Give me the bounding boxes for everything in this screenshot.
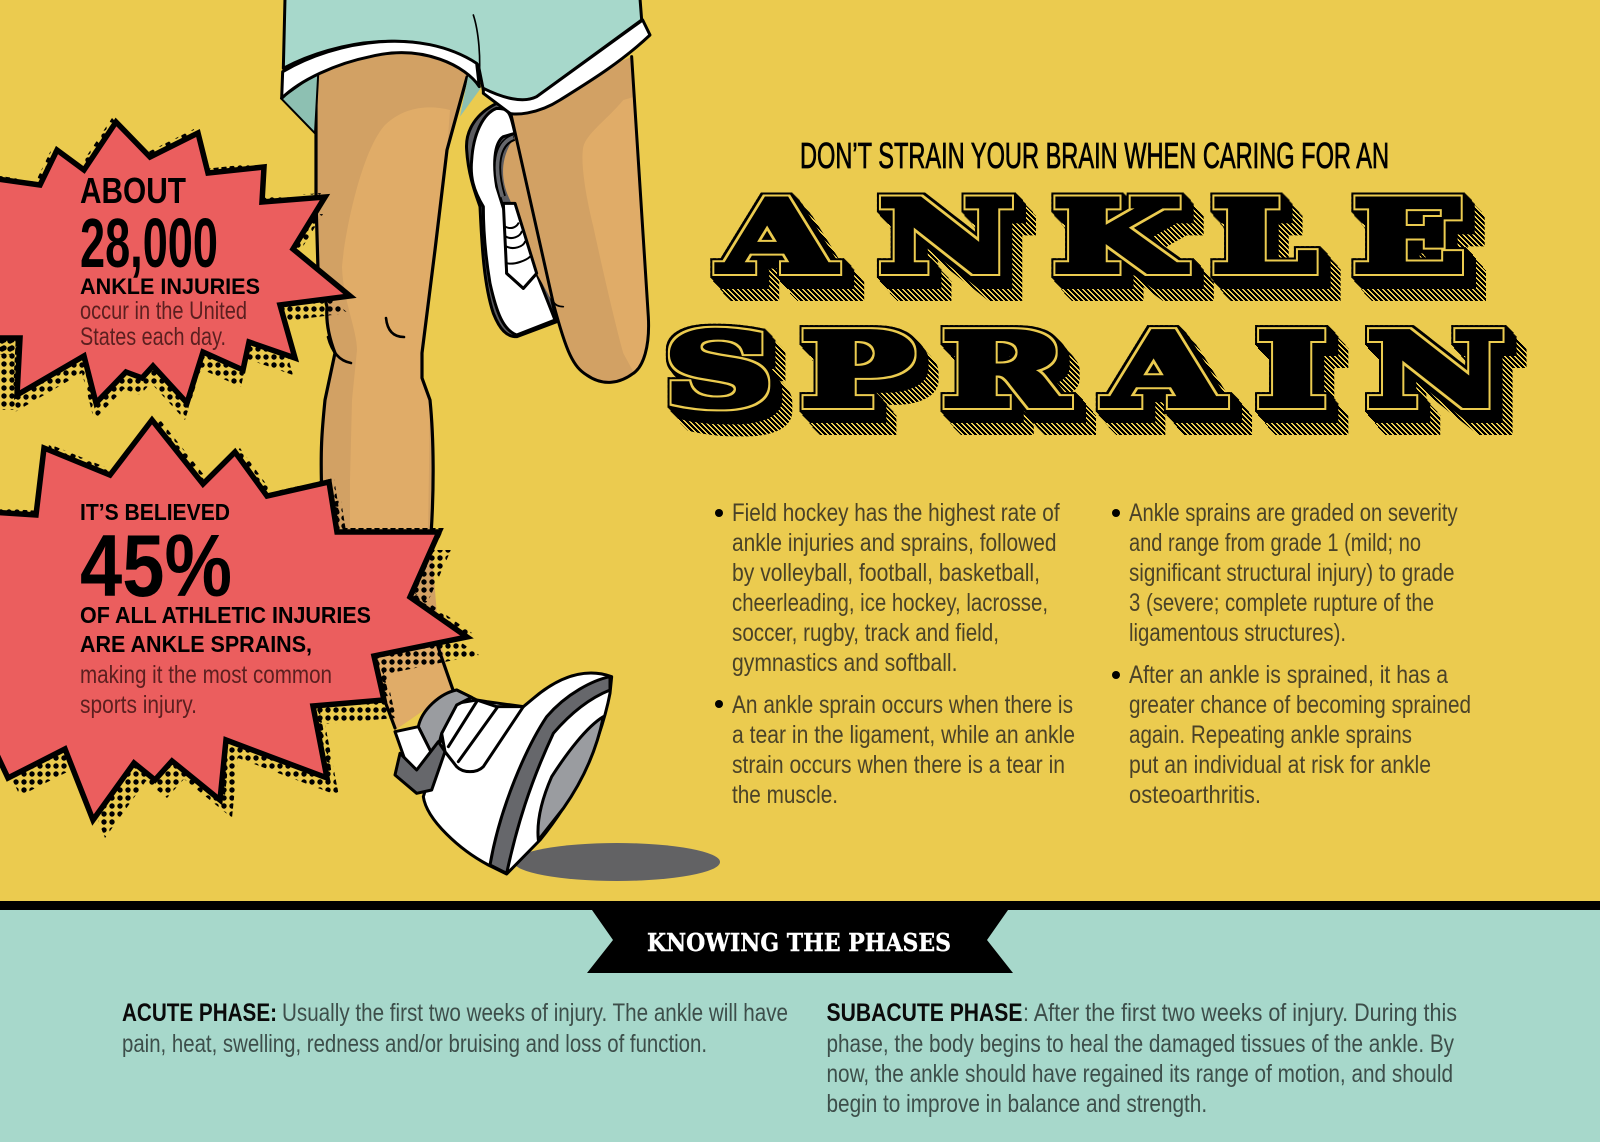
acute phase text: pain, heat, swelling, redness and/or bruising and loss of function. xyxy=(122,1030,707,1058)
raised shoe xyxy=(467,103,557,337)
panel: knowing the phases xyxy=(0,901,1600,1142)
bullet: field hockey: Field hockey has the highest rate of xyxy=(732,499,1060,527)
stat text: 45% xyxy=(80,516,232,615)
stat text: ANKLE INJURIES xyxy=(80,274,260,299)
bullet: sprain vs strain xyxy=(715,691,1075,809)
bullet: grades: 3 (severe; complete rupture of the xyxy=(1129,589,1434,617)
ribbon heading: KNOWING THE PHASES xyxy=(647,928,951,957)
bullet: field hockey: gymnastics and softball. xyxy=(732,649,958,677)
standing leg xyxy=(316,40,470,730)
bullet: field hockey: by volleyball, football, basketball, xyxy=(732,559,1040,587)
planted shoe xyxy=(395,673,612,874)
title: ankle sprain: SPRAIN xyxy=(664,312,1504,429)
raised leg xyxy=(510,57,649,382)
subacute phase text: phase, the body begins to heal the damaged tissues of the ankle. By xyxy=(826,1030,1454,1058)
shorts xyxy=(281,0,650,133)
bullet: grades: ligamentous structures). xyxy=(1129,619,1346,647)
bullet: recurrence xyxy=(1112,661,1471,809)
bullet: sprain vs strain: a tear in the ligament, while an ankle xyxy=(732,721,1075,749)
bullet: grades: and range from grade 1 (mild; no xyxy=(1129,529,1421,557)
bullet: recurrence: greater chance of becoming sprained xyxy=(1129,691,1471,719)
title: ankle sprain: ANKLE xyxy=(719,180,1465,295)
stat text: IT’S BELIEVED xyxy=(80,499,230,525)
stat text: 28,000 xyxy=(80,204,218,282)
acute phase text: Usually the first two weeks of injury. The ankle will have xyxy=(282,999,788,1027)
bullet: grades xyxy=(1112,499,1458,647)
callout burst: 45% of athletic injuries xyxy=(0,416,479,838)
title block xyxy=(664,135,1504,429)
stat text: ABOUT xyxy=(80,170,186,211)
facts column 1 xyxy=(715,499,1075,809)
stat text: making it the most common xyxy=(80,661,332,689)
acute phase text: ACUTE PHASE: xyxy=(122,999,277,1027)
bullet: sprain vs strain: An ankle sprain occurs when there is xyxy=(732,691,1073,719)
stat text: occur in the United xyxy=(80,297,247,325)
stat text: States each day. xyxy=(80,323,226,351)
bullet: grades: Ankle sprains are graded on severity xyxy=(1129,499,1458,527)
title: ankle sprain xyxy=(664,180,1504,429)
bullet: sprain vs strain: strain occurs when there is a tear in xyxy=(732,751,1065,779)
stat text: sports injury. xyxy=(80,691,197,719)
bullet: field hockey: soccer, rugby, track and field, xyxy=(732,619,999,647)
subacute phase text: now, the ankle should have regained its range of motion, and should xyxy=(826,1060,1453,1088)
illustration: running legs xyxy=(281,0,720,881)
callout burst: 28,000 ankle injuries xyxy=(0,118,350,420)
bullet: field hockey: cheerleading, ice hockey, lacrosse, xyxy=(732,589,1048,617)
stat text xyxy=(80,170,260,351)
ground shadow xyxy=(514,843,720,881)
subacute phase text: : After the first two weeks of injury. During this xyxy=(1023,999,1457,1027)
acute phase text xyxy=(122,999,788,1058)
bullet: grades: significant structural injury) to grade xyxy=(1129,559,1454,587)
bullet: sprain vs strain: the muscle. xyxy=(732,781,838,809)
bullet: recurrence: again. Repeating ankle sprains xyxy=(1129,721,1412,749)
bullet: field hockey: ankle injuries and sprains, followed xyxy=(732,529,1056,557)
stat text xyxy=(80,499,371,719)
stat text: OF ALL ATHLETIC INJURIES xyxy=(80,602,371,628)
bullet: recurrence: put an individual at risk for ankle xyxy=(1129,751,1431,779)
stat text: ARE ANKLE SPRAINS, xyxy=(80,631,312,657)
bullet: recurrence: After an ankle is sprained, it has a xyxy=(1129,661,1448,689)
bullet: field hockey xyxy=(715,499,1060,677)
bullet: recurrence: osteoarthritis. xyxy=(1129,781,1261,809)
facts column 2 xyxy=(1112,499,1471,809)
ribbon heading xyxy=(587,905,1013,973)
subacute phase text: begin to improve in balance and strength. xyxy=(826,1090,1207,1118)
subacute phase text: SUBACUTE PHASE xyxy=(826,999,1022,1027)
subacute phase text xyxy=(826,999,1457,1118)
